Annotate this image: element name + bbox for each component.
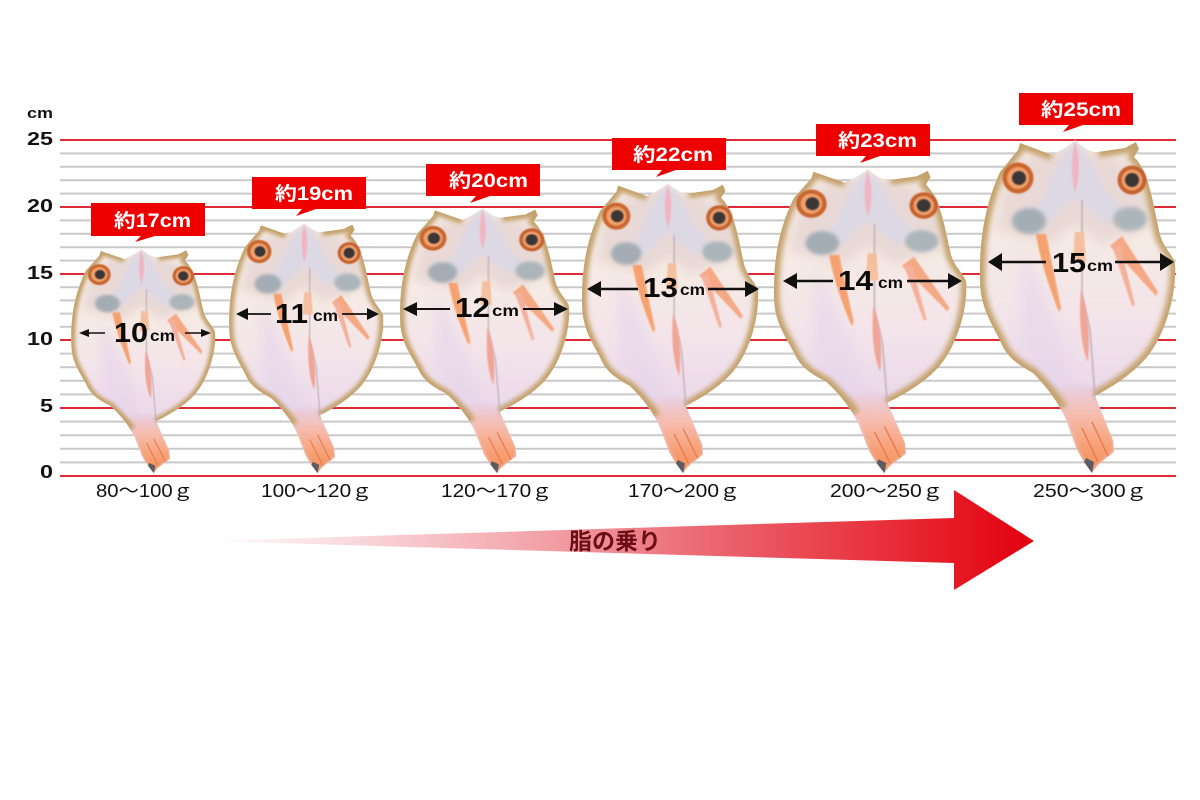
y axis labels: 20 (27, 196, 53, 216)
weight labels: 100～120ｇ (261, 481, 372, 501)
callout: about 20cm (426, 164, 540, 203)
y axis labels: 0 (40, 462, 53, 482)
fish 5: 14cm wide, 23cm long (769, 164, 971, 479)
width measure: 12cm (403, 292, 568, 323)
fish 4: 13cm wide, 22cm long (578, 179, 762, 479)
width measure: 14cm: 14 (838, 265, 873, 296)
arrow: fat content increases (208, 490, 1034, 590)
width measure: 12cm: 12 (455, 292, 490, 323)
weight labels: 170～200ｇ (628, 481, 740, 501)
weight labels: 80～100ｇ (96, 481, 193, 501)
y axis labels (27, 105, 53, 482)
callout: about 17cm: 約17cm (114, 210, 191, 232)
callout: about 22cm: 約22cm (633, 144, 713, 166)
callout: about 23cm (816, 124, 930, 163)
grid lines (60, 140, 1176, 476)
width measure: 13cm: cm (680, 282, 705, 299)
weight labels: 200～250ｇ (830, 481, 943, 501)
width measure: 14cm (783, 265, 962, 296)
fish 1: 10cm wide, 17cm long (68, 246, 219, 478)
fish 6: 15cm wide, 25cm long (975, 135, 1180, 480)
arrow: fat content increases: 脂の乗り (569, 528, 661, 554)
callout: about 25cm: 約25cm (1041, 99, 1121, 121)
fish 2: 11cm wide, 19cm long (225, 219, 387, 478)
width measure: 11cm (236, 298, 379, 329)
y axis labels: 15 (27, 263, 53, 283)
width measure: 15cm: 15 (1052, 247, 1086, 278)
callout: about 23cm: 約23cm (838, 130, 917, 152)
weight labels: 120～170ｇ (441, 481, 552, 501)
width measure: 10cm (79, 317, 211, 348)
y axis labels: 10 (27, 329, 53, 349)
callout: about 25cm (1019, 93, 1133, 132)
callout: about 19cm: 約19cm (275, 183, 353, 205)
y axis labels: 5 (40, 396, 53, 416)
width measure: 13cm: 13 (643, 272, 678, 303)
y axis labels: 25 (27, 129, 53, 149)
width measure: 10cm: 10 (114, 317, 148, 348)
callout: about 22cm (612, 138, 726, 177)
weight labels: 250～300ｇ (1033, 481, 1147, 501)
width measure: 10cm: cm (150, 328, 175, 345)
width measure: 13cm (587, 272, 759, 303)
callout: about 17cm (91, 203, 205, 242)
width measure: 12cm: cm (492, 303, 519, 320)
width measure: 11cm: cm (313, 308, 338, 325)
width measure: 11cm: 11 (275, 298, 308, 329)
callout: about 20cm: 約20cm (449, 170, 528, 192)
fish 3: 12cm wide, 20cm long (396, 204, 573, 479)
weight labels (96, 481, 1147, 501)
width measure: 14cm: cm (878, 275, 903, 292)
y axis labels: cm (27, 105, 53, 122)
width measure: 15cm (988, 247, 1174, 278)
callout: about 19cm (252, 177, 366, 216)
width measure: 15cm: cm (1087, 258, 1113, 275)
